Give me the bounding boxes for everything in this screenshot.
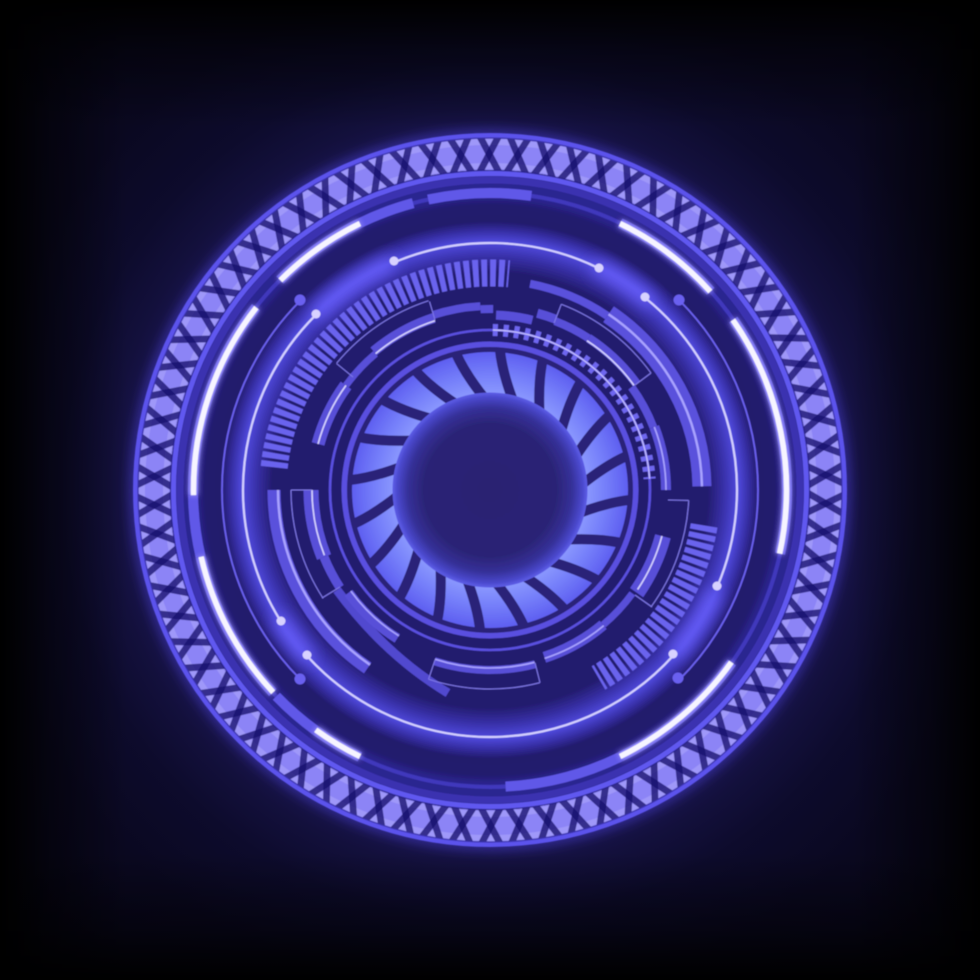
inner dark disc with glow band bbox=[170, 170, 810, 810]
tick scale: upper left bbox=[274, 273, 509, 467]
light node dots bbox=[276, 256, 722, 660]
thin outlined frames bbox=[210, 210, 770, 770]
white arc glow bbox=[71, 71, 909, 909]
white arc segments bbox=[71, 71, 909, 909]
blue bands under white arcs bbox=[70, 70, 910, 910]
inner arc bands bbox=[235, 235, 745, 745]
tick scale: lower right bbox=[598, 525, 704, 678]
blue node dots bbox=[294, 294, 684, 684]
patterned X ring bbox=[134, 134, 846, 846]
concentric rim rings bbox=[174, 174, 806, 806]
outer halo bbox=[135, 135, 845, 845]
outer rim bbox=[136, 136, 844, 844]
blade turbine ring bbox=[344, 344, 636, 636]
dashed segmented arc bbox=[493, 330, 650, 479]
outer arc bands bbox=[190, 190, 790, 790]
bright thin arcs bbox=[141, 141, 839, 839]
light lines on arc bands bbox=[195, 195, 785, 785]
central hub bbox=[392, 392, 588, 588]
thin outer arcs bbox=[111, 111, 869, 869]
glow between thin arcs bbox=[141, 141, 839, 839]
thin inner ring bbox=[330, 330, 650, 650]
